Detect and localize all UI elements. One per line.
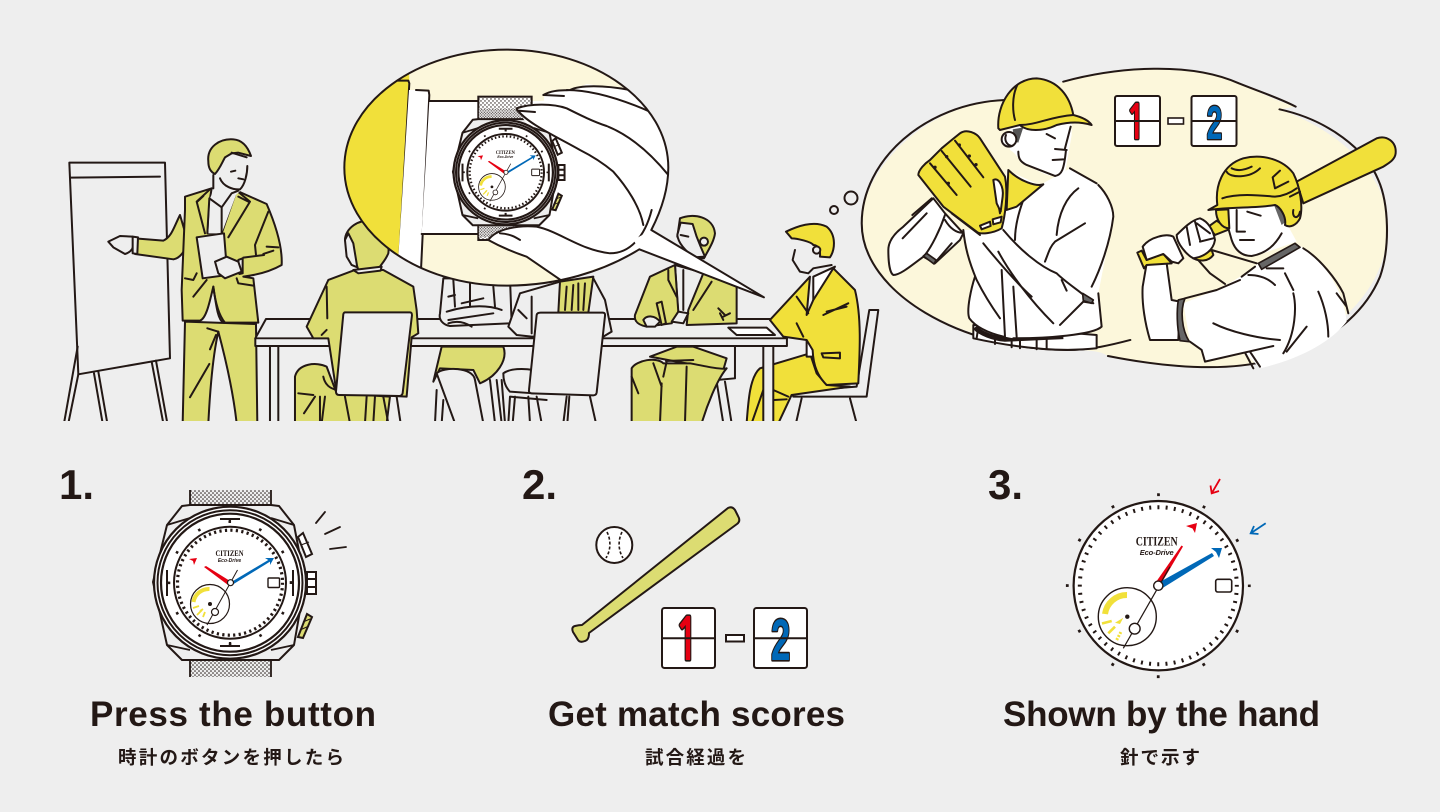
- batter neck: [1258, 243, 1300, 269]
- bat: [1297, 137, 1396, 203]
- blue arrow: [1251, 523, 1266, 534]
- presenter: [182, 139, 282, 423]
- score dash: [726, 635, 744, 642]
- top score card: 1: 1: [1126, 101, 1146, 147]
- batter grip: [1137, 251, 1172, 268]
- batter: [1137, 137, 1396, 368]
- lower finger: [490, 227, 630, 279]
- white shirt cuff: [398, 90, 429, 273]
- step 2 heading: Get match scores: [548, 695, 845, 734]
- white wrist and hand back: [422, 100, 648, 252]
- baseball bat: [572, 507, 739, 642]
- yellow sleeve: [345, 74, 410, 254]
- upper fingers: [518, 84, 630, 133]
- batter hands: [1143, 235, 1183, 263]
- seated man in olive suit lower body: [632, 347, 735, 423]
- baseball: [596, 527, 632, 563]
- seated man in olive suit upper body: [635, 216, 737, 327]
- step 2 japanese caption: 試合経過を: [645, 747, 746, 768]
- step 1 heading: Press the button: [90, 695, 376, 734]
- pitcher undershirt: [1007, 170, 1043, 210]
- seated man in yellow suit lower body and chair: [747, 310, 878, 423]
- table right leg and paper: [728, 328, 775, 427]
- mesh band: [478, 97, 532, 240]
- score card: 2: [754, 608, 807, 673]
- meeting room scene: [64, 139, 878, 427]
- lens tail: [633, 230, 764, 297]
- seated woman legs under the table: [433, 347, 533, 423]
- step 3 japanese caption: 針で示す: [1120, 747, 1200, 768]
- step 3 watch dial: Eco-Drive: [1140, 548, 1174, 557]
- step 1 japanese caption: 時計のボタンを押したら: [118, 747, 344, 768]
- button press lines: [316, 512, 346, 549]
- score card: 2: 2: [771, 609, 790, 673]
- pitcher torso: [963, 168, 1113, 338]
- table rear legs: [268, 347, 280, 421]
- back seated man: [295, 221, 418, 423]
- red arrow: [1210, 479, 1220, 493]
- pitcher: [888, 78, 1113, 350]
- thought bubble dots: [830, 192, 858, 214]
- thought bubble background: [862, 69, 1388, 367]
- long hair woman: [508, 277, 612, 337]
- top score card: 2: 2: [1207, 98, 1222, 150]
- score card: 1: [662, 608, 715, 669]
- batter helmet: [1216, 209, 1229, 228]
- magnifier callout: watch on wrist: [337, 40, 764, 297]
- table: [255, 319, 787, 346]
- step 1 watch illustration: [153, 490, 316, 677]
- chair in front of long hair woman: [508, 313, 605, 423]
- score card: 1: 1: [674, 612, 700, 669]
- lens outline: [344, 50, 764, 297]
- batter back arm: [1197, 250, 1257, 284]
- step 1 number: 1.: [59, 461, 94, 508]
- seated woman upper body: [440, 278, 512, 327]
- top scoreboard: [1115, 96, 1236, 150]
- chair in front of back seated man: [320, 312, 412, 423]
- step 1 watch illustration: Eco-Drive: [218, 558, 241, 564]
- step 3 number: 3.: [988, 461, 1023, 508]
- top score dash: [1168, 118, 1184, 124]
- step 1 watch illustration: CITIZEN: [216, 549, 244, 558]
- pitcher cap: [998, 78, 1092, 130]
- pitcher pants and belt: [973, 325, 1097, 350]
- pitcher arm lines: [963, 230, 1093, 325]
- flip chart: [64, 163, 170, 423]
- batter face: [1225, 205, 1297, 255]
- step 3 heading: Shown by the hand: [1003, 695, 1320, 734]
- step 3 watch dial: [1067, 495, 1249, 677]
- batter torso: [1183, 245, 1347, 368]
- presenter arm and hand: [108, 215, 188, 259]
- batter forearm: [1142, 263, 1180, 340]
- pitcher face: [1010, 122, 1072, 176]
- glove: [918, 131, 1006, 233]
- step 3 watch dial: CITIZEN: [1136, 534, 1178, 548]
- seated man in yellow suit upper body: [770, 224, 860, 385]
- step 2 scoreboard: [662, 608, 807, 673]
- step 2 number: 2.: [522, 461, 557, 508]
- pitcher back arm: [888, 198, 963, 275]
- small watch: [453, 109, 565, 237]
